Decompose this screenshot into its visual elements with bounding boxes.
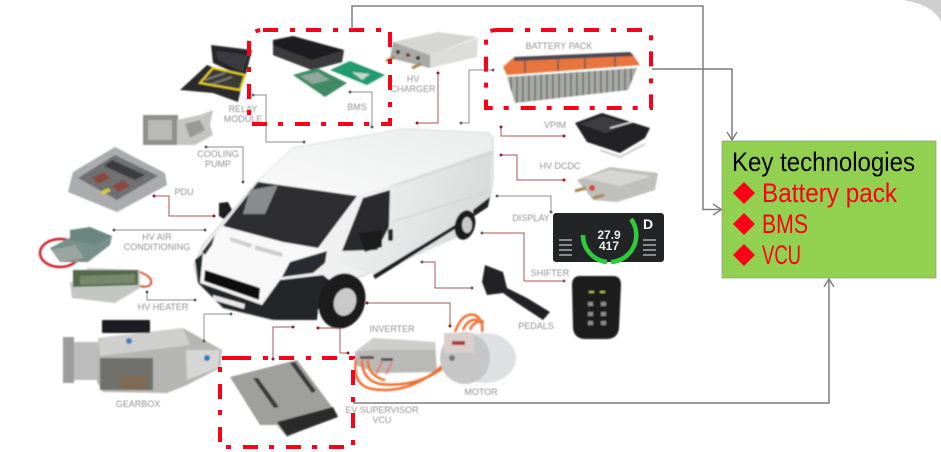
component labels: RELAY [229, 104, 257, 114]
item: VCU: VCU [762, 240, 801, 270]
component labels [116, 41, 592, 425]
display [553, 213, 664, 262]
icon: cooling pump [143, 110, 213, 145]
heading: key technologies: Key technologies [732, 147, 915, 177]
component labels: SHIFTER [531, 268, 570, 278]
item: BMS: BMS [762, 209, 808, 239]
icon: HV charger [386, 32, 478, 68]
arrow: battery pack to key technologies [652, 69, 737, 140]
item: battery pack: Battery pack [762, 178, 897, 208]
display: 27.9 [597, 228, 621, 242]
icon: shifter [572, 276, 621, 339]
icon: VPIM [575, 113, 650, 157]
decorative corner [903, 0, 941, 22]
component labels: EV SUPERVISOR [345, 405, 419, 415]
icon: relay module case [180, 45, 252, 102]
component labels: COOLING [197, 149, 239, 159]
component labels: MOTOR [464, 387, 498, 397]
icon: PDU [68, 147, 167, 212]
connector lines [112, 68, 566, 360]
display: D [643, 216, 653, 232]
component labels: GEARBOX [116, 399, 160, 409]
icon: battery pack [503, 52, 640, 103]
icon: BMS unit [273, 36, 385, 97]
item: VCU [733, 240, 801, 270]
highlight box: BMS [249, 30, 390, 124]
icon: gearbox [63, 320, 222, 393]
component labels: VPIM [544, 120, 566, 130]
item: BMS [733, 209, 808, 239]
component labels: CONDITIONING [124, 242, 190, 252]
arrow: BMS to key technologies [352, 6, 722, 215]
van [194, 129, 493, 335]
highlight box: battery pack [486, 30, 651, 108]
component labels: INVERTER [369, 324, 415, 334]
icon: motor [440, 315, 516, 384]
component labels: MODULE [224, 114, 262, 124]
icon: inverter [355, 338, 443, 390]
icon: HV heater [70, 268, 151, 303]
component labels: CHARGER [390, 84, 436, 94]
component labels: PEDALS [518, 321, 554, 331]
component labels: BMS [347, 102, 367, 112]
icon: HV air conditioning [40, 227, 112, 267]
icon: EV supervisor ECU [230, 360, 338, 437]
component images [40, 32, 658, 437]
panel: key technologies [722, 141, 936, 278]
component labels: HV DCDC [539, 161, 581, 171]
component labels: DISPLAY [512, 213, 550, 223]
highlight box: VCU [220, 358, 353, 447]
component labels: PDU [174, 187, 194, 197]
icon: pedals [482, 265, 550, 320]
arrow: VCU to key technologies [353, 279, 834, 403]
icon: HV DCDC [575, 167, 658, 202]
component labels: HV [407, 74, 419, 84]
component labels: PUMP [205, 159, 231, 169]
component labels: VCU [372, 415, 392, 425]
component labels: HV HEATER [138, 302, 189, 312]
component labels: HV AIR [142, 232, 172, 242]
component labels: BATTERY PACK [526, 41, 592, 51]
display: 417 [599, 239, 619, 253]
